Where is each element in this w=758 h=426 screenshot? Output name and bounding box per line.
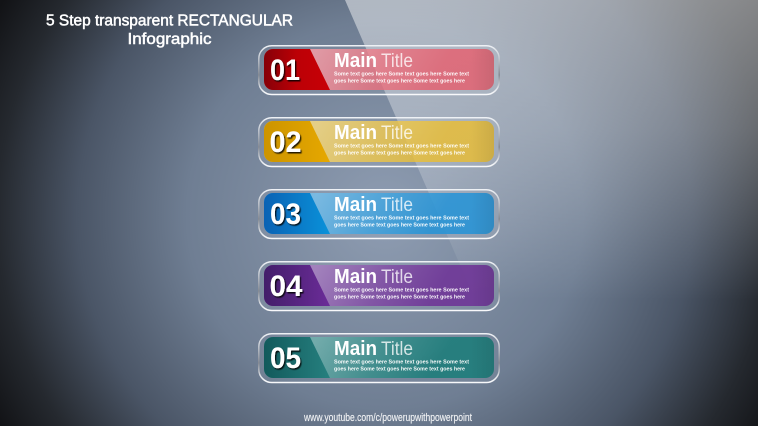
body text 03: Some text goes here Some text goes here Some text [334, 216, 469, 222]
body text 02: goes here Some text goes here Some text goes here [334, 150, 465, 156]
title: Infographic [128, 31, 212, 48]
title: 5 Step transparent RECTANGULAR [46, 12, 293, 30]
card 01 colour band [264, 49, 494, 90]
body text 05: goes here Some text goes here Some text goes here [334, 366, 465, 372]
number 03: 03 [270, 198, 301, 231]
card 03 colour band [264, 193, 494, 234]
card 05 frame [259, 334, 499, 382]
body text 01: goes here Some text goes here Some text goes here [334, 78, 465, 84]
card 02 colour band [264, 121, 494, 162]
card 02 frame [259, 118, 499, 166]
card 04 frame [259, 262, 499, 310]
body text 04: goes here Some text goes here Some text goes here [334, 294, 465, 300]
body text 03 [334, 216, 469, 228]
step 02 card [259, 118, 499, 166]
body text 02 [334, 144, 469, 156]
number 02: 02 [270, 126, 302, 159]
body text 03: goes here Some text goes here Some text goes here [334, 222, 465, 228]
step 02 card: Title [381, 122, 413, 144]
step 04 card [259, 262, 499, 310]
body text 04 [334, 288, 469, 300]
main title 05: Main [334, 338, 377, 360]
main title 01: Main [334, 50, 377, 72]
number 04: 04 [270, 270, 303, 303]
card 01 frame [259, 46, 499, 94]
number 01: 01 [270, 54, 300, 87]
footer url: www.youtube.com/c/powerupwithpowerpoint [303, 412, 472, 424]
card 05 colour band [264, 337, 494, 378]
step 03 card [259, 190, 499, 238]
number 05: 05 [270, 342, 301, 375]
step 05 card: Title [381, 338, 413, 360]
light diagonal wedge [345, 0, 758, 426]
title [46, 12, 293, 48]
main title 03: Main [334, 194, 377, 216]
card 04 colour band [264, 265, 494, 306]
body text 05: Some text goes here Some text goes here Some text [334, 360, 469, 366]
card 03 frame [259, 190, 499, 238]
body text 01 [334, 72, 469, 84]
body text 02: Some text goes here Some text goes here Some text [334, 144, 469, 150]
body text 04: Some text goes here Some text goes here Some text [334, 288, 469, 294]
body text 01: Some text goes here Some text goes here Some text [334, 72, 469, 78]
body text 05 [334, 360, 469, 372]
main title 04: Main [334, 266, 377, 288]
step 04 card: Title [381, 266, 413, 288]
step 01 card: Title [381, 50, 413, 72]
main title 02: Main [334, 122, 377, 144]
step 01 card [259, 46, 499, 94]
step 03 card: Title [381, 194, 413, 216]
step 05 card [259, 334, 499, 382]
